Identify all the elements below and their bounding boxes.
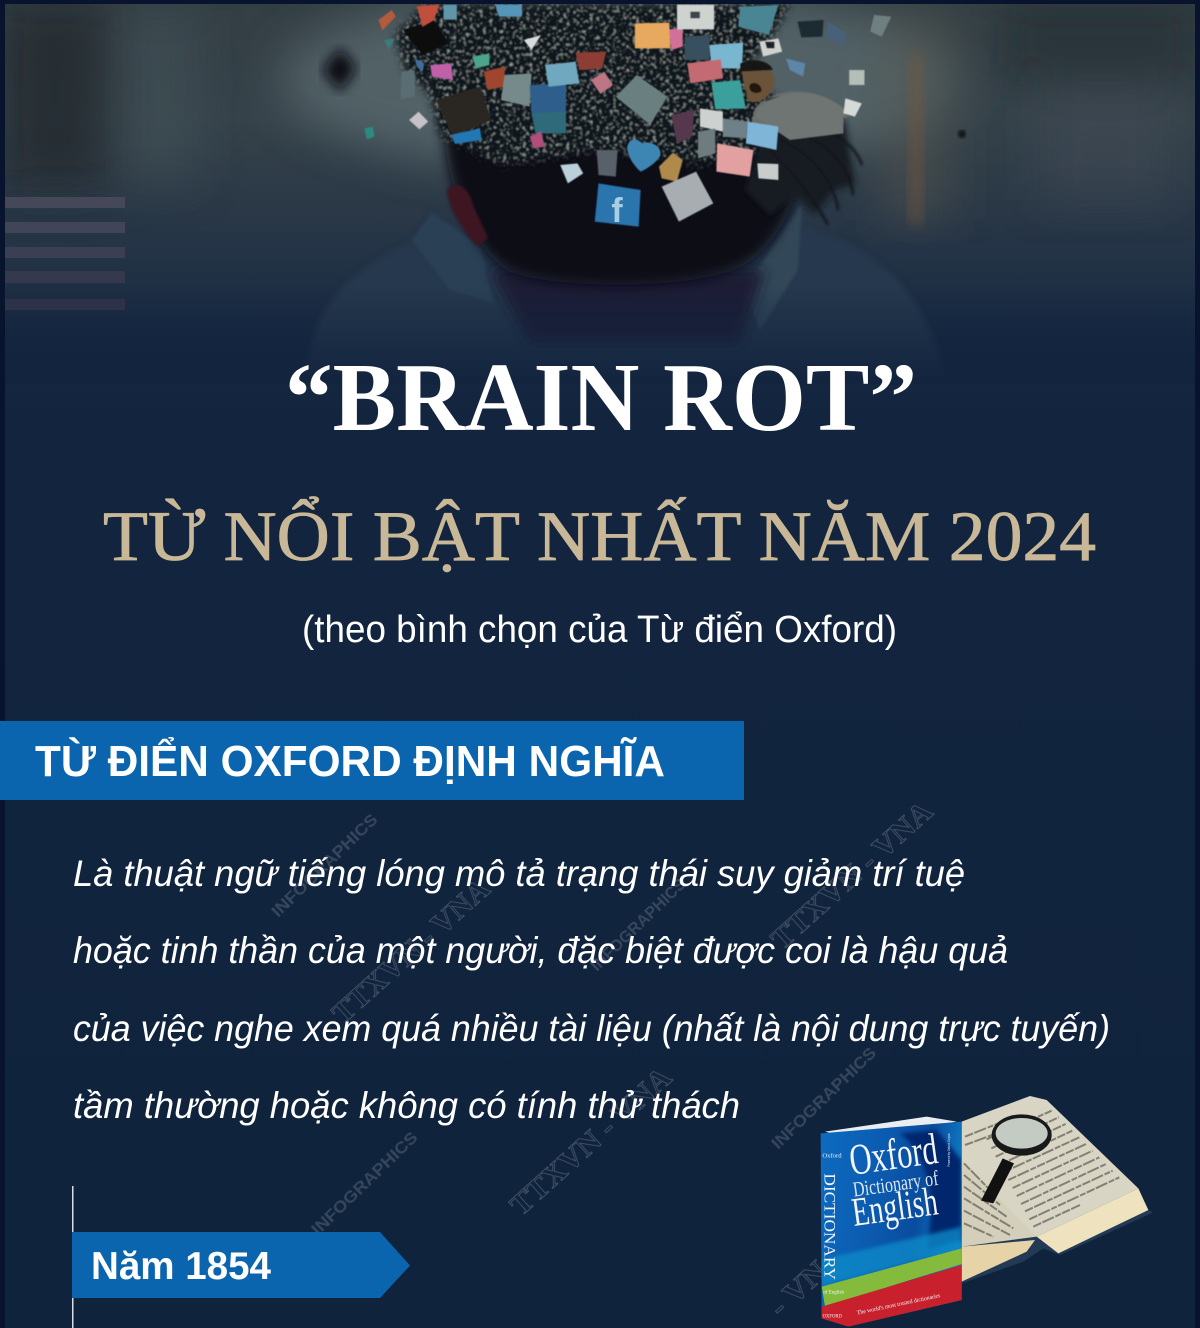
section banner — [0, 721, 744, 800]
illustration: Oxford dictionary and open book with magnifier — [820, 1096, 1153, 1327]
grey striped hair bun — [750, 92, 848, 129]
hair strands — [745, 120, 862, 225]
dictionary cover: The world's most trusted dictionaries — [857, 1293, 942, 1317]
open book — [962, 1096, 1153, 1283]
source note: (theo bình chọn của Từ điển Oxford) — [302, 609, 897, 651]
bottom fade of the photo — [0, 285, 1200, 385]
definition text — [73, 853, 1110, 1126]
timeline line — [72, 1186, 74, 1328]
watermarks — [268, 794, 939, 1323]
watermarks: INFOGRAPHICS — [768, 1043, 880, 1153]
dictionary cover: OXFORD — [823, 1314, 842, 1319]
section banner: TỪ ĐIỂN OXFORD ĐỊNH NGHĨA — [35, 735, 665, 786]
watermarks: INFOGRAPHICS — [268, 810, 381, 921]
definition text: hoặc tinh thần của một người, đặc biệt được coi là hậu quả — [73, 930, 1008, 971]
watermarks: INFOGRAPHICS — [308, 1128, 421, 1239]
watermarks: TTXVN - VNA — [765, 794, 939, 956]
dictionary cover: English — [849, 1178, 940, 1235]
head silhouette and dark hair — [444, 86, 801, 285]
dictionary cover: Oxford — [846, 1124, 941, 1185]
magnifying glass — [981, 1114, 1052, 1203]
subtitle: TỪ NỔI BẬT NHẤT NĂM 2024 — [103, 496, 1096, 576]
blurred dark square at left — [322, 48, 357, 92]
watermarks: - VNA — [763, 1238, 852, 1323]
timeline arrow: year 1854: Năm 1854 — [91, 1245, 271, 1288]
jacket shoulders — [305, 203, 945, 378]
dictionary cover: of English — [823, 1290, 844, 1295]
dark particle right — [958, 130, 966, 138]
speckled particle cloud — [395, 4, 790, 165]
decorative stripes — [5, 197, 125, 310]
title: BRAIN ROT: “BRAIN ROT” — [285, 344, 917, 452]
definition text: của việc nghe xem quá nhiều tài liệu (nhất là nội dung trực tuyến) — [73, 1008, 1110, 1049]
dictionary cover — [820, 1117, 962, 1327]
watermarks: TTXVN - VNA — [504, 1060, 678, 1222]
definition text: Là thuật ngữ tiếng lóng mô tả trạng thái suy giảm trí tuệ — [73, 853, 965, 894]
facebook tile letter: f — [611, 192, 623, 230]
watermarks: TTXVN - VNA — [326, 872, 497, 1030]
dictionary cover: Oxford — [822, 1152, 842, 1159]
dictionary cover: DICTIONARY — [820, 1173, 837, 1280]
watermarks: INFOGRAPHICS — [587, 874, 690, 975]
dictionary cover: Powered by Oxford Corpus — [946, 1133, 951, 1167]
hero photo: person with head dissolving into social media tiles — [0, 0, 1200, 385]
timeline arrow: year 1854 — [72, 1232, 410, 1298]
dictionary cover: Dictionary of — [851, 1166, 941, 1202]
red hair tie — [447, 185, 488, 246]
social media tiles — [364, 5, 891, 227]
definition text: tầm thường hoặc không có tính thử thách — [73, 1085, 740, 1126]
